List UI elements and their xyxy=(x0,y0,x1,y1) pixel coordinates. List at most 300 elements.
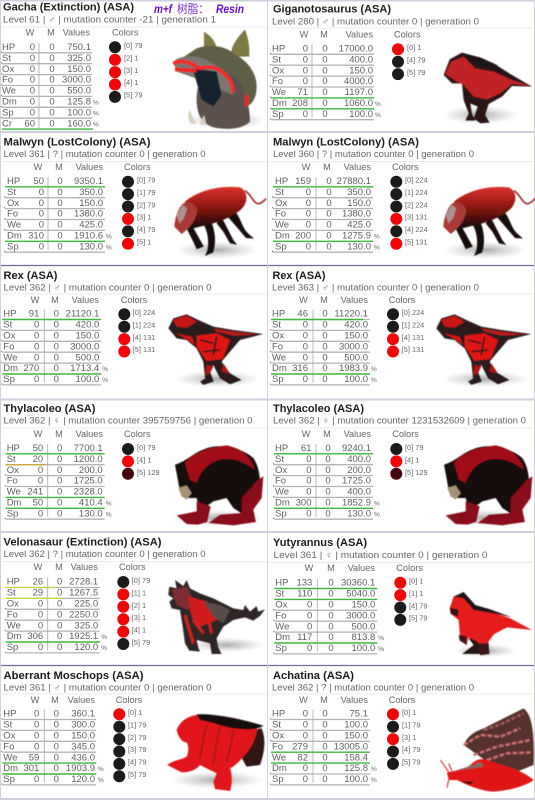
stat table: Dm xyxy=(7,498,22,508)
stat table: % xyxy=(98,777,104,784)
stat table: 0 xyxy=(328,643,334,654)
column headers: W xyxy=(26,28,35,38)
column headers: M xyxy=(55,429,63,439)
column headers: Values xyxy=(344,429,371,439)
color swatches: [4] 79 xyxy=(128,758,146,767)
stat table: 1725.0 xyxy=(74,476,103,487)
stat table: 50 xyxy=(33,443,43,454)
stat table: 3000.0 xyxy=(346,610,375,621)
stat table: 0 xyxy=(49,64,55,75)
stat table: Sp xyxy=(3,374,15,385)
stat table: 0 xyxy=(30,42,35,53)
stat table: St xyxy=(3,720,13,731)
stat table: 158.4 xyxy=(344,752,368,763)
stat table: 316 xyxy=(292,363,308,374)
stat table: 0 xyxy=(39,241,44,252)
stat table: 60 xyxy=(24,118,35,129)
stat table xyxy=(270,709,377,785)
color swatches xyxy=(387,708,420,770)
stat table: 1197.0 xyxy=(345,87,373,98)
stat table: 279 xyxy=(292,741,308,752)
color swatches xyxy=(390,176,428,250)
panel: Malwyn 360 xyxy=(269,136,535,259)
stat table: 0 xyxy=(325,498,331,508)
stat table: 0 xyxy=(322,752,328,763)
stat table: St xyxy=(272,320,281,331)
stat table: 0 xyxy=(54,709,59,720)
callout: m+f resin xyxy=(154,1,244,16)
column headers: Colors xyxy=(392,162,419,172)
stat table: 0 xyxy=(34,741,39,752)
stat table: HP xyxy=(2,42,15,53)
stat table: 0 xyxy=(38,508,43,519)
stat table: 0 xyxy=(303,54,308,65)
stat table: 0 xyxy=(54,774,59,785)
title: Aberrant Moschops: Aberrant Moschops (ASA) xyxy=(4,670,144,682)
stat table: 0 xyxy=(49,96,55,108)
stat table: 0 xyxy=(54,763,59,774)
stat table: 0 xyxy=(49,118,55,129)
stat table: Dm xyxy=(272,363,287,374)
color swatches: [0] 224 xyxy=(405,176,428,184)
stat table: 0 xyxy=(306,198,311,209)
stat table: 0 xyxy=(57,599,62,610)
stat table: 46 xyxy=(297,309,308,320)
stat table: 0 xyxy=(54,341,59,352)
column headers: W xyxy=(302,162,311,172)
stat table: 0 xyxy=(326,230,332,242)
color swatches: [3] 79 xyxy=(128,745,146,754)
stat table: 150.0 xyxy=(344,331,368,342)
stat table: 0 xyxy=(57,220,63,231)
stat table: Fo xyxy=(272,76,283,87)
stat table: 1275.9 xyxy=(342,230,371,242)
column headers xyxy=(300,30,421,40)
stat table: HP xyxy=(272,44,285,54)
column headers: W xyxy=(300,30,309,40)
stat table: 71 xyxy=(297,87,308,98)
stat table: 0 xyxy=(322,44,328,54)
stat table: Fo xyxy=(7,609,18,620)
stat table: 0 xyxy=(34,774,39,785)
stat table: 270 xyxy=(23,363,39,374)
color swatches: [1] 224 xyxy=(405,188,428,197)
stat table: 0 xyxy=(325,443,331,454)
level line: Level 280 | ♂ | mutation counter 0 | generation 0 xyxy=(272,17,479,27)
stat table xyxy=(272,176,380,252)
color swatches: [1] 224 xyxy=(402,320,424,329)
stat table xyxy=(4,176,112,252)
stat table: Ox xyxy=(275,198,287,209)
stat table: 1267.5 xyxy=(69,588,98,599)
stat table: Sp xyxy=(7,241,19,252)
stat table: 1200.0 xyxy=(74,454,103,465)
stat table: 0 xyxy=(303,320,308,331)
column headers xyxy=(299,295,416,305)
panel: Rex 362 xyxy=(2,270,265,387)
stat table: 0 xyxy=(307,600,312,611)
color swatches xyxy=(122,176,156,250)
title: Gacha: Gacha (Extinction) (ASA) xyxy=(3,2,134,14)
stat table: Ox xyxy=(272,731,284,742)
stat table: % xyxy=(374,244,380,251)
stat table: 0 xyxy=(322,98,328,109)
color swatches: [0] 1 xyxy=(407,43,421,52)
stat table: 208 xyxy=(292,98,308,109)
stat table: 159 xyxy=(295,176,311,187)
stat table: 0 xyxy=(34,331,39,342)
stat table: 0 xyxy=(49,86,55,97)
stat table: 82 xyxy=(297,752,308,763)
stat table: 5040.0 xyxy=(346,589,375,600)
stat table: 350.0 xyxy=(79,187,103,198)
stat table: 0 xyxy=(38,465,43,476)
stat table: 30360.1 xyxy=(341,578,375,589)
stat table xyxy=(5,577,107,653)
column headers xyxy=(34,162,151,172)
stat table: 117 xyxy=(297,632,312,643)
column headers: W xyxy=(302,429,311,439)
stat table: 160.0 xyxy=(67,118,91,129)
stat table: % xyxy=(106,234,112,240)
stat table: Sp xyxy=(7,642,18,653)
column headers: M xyxy=(327,563,335,573)
stat table: Cr xyxy=(2,118,12,129)
color swatches: [5] 79 xyxy=(407,68,426,77)
stat table: 0 xyxy=(322,109,328,120)
column headers: M xyxy=(323,162,331,172)
stat table: We xyxy=(272,87,286,98)
stat table: 0 xyxy=(57,508,62,519)
stat table: Ox xyxy=(3,331,16,342)
level line: Level 361 | ♀ | mutation counter 0 | generation 0 xyxy=(274,550,488,560)
stat table: We xyxy=(275,621,289,632)
stat table: 0 xyxy=(38,620,43,631)
stat table: 0 xyxy=(322,320,328,331)
column headers: Colors xyxy=(389,295,416,305)
callout: m+f resin: m+f xyxy=(154,2,173,16)
column headers: W xyxy=(34,162,43,172)
creature: Thylacoleo xyxy=(441,445,532,526)
column headers xyxy=(31,295,148,305)
panel: Rex 363 xyxy=(269,270,533,387)
creature: Rex xyxy=(168,314,263,387)
stat table: 0 xyxy=(307,643,312,654)
stat table: 0 xyxy=(322,741,328,752)
stat table: 0 xyxy=(326,209,332,220)
column headers: M xyxy=(320,295,328,305)
stat table: 0 xyxy=(30,107,35,118)
stat table: 133 xyxy=(296,578,312,589)
stat table: 130.0 xyxy=(79,241,103,252)
stat table: 0 xyxy=(328,610,334,621)
stat table: 91 xyxy=(29,309,39,320)
stat table: HP xyxy=(3,709,17,720)
stat table: 1903.9 xyxy=(66,763,95,774)
stat table: 1983.9 xyxy=(339,363,368,374)
stat table: Sp xyxy=(2,107,14,118)
stat table: Sp xyxy=(275,643,287,654)
stat table: We xyxy=(272,352,286,363)
column headers: Values xyxy=(72,295,99,305)
stat table: 0 xyxy=(54,720,59,731)
stat table: 100.0 xyxy=(76,374,99,385)
creature: Yutyrannus xyxy=(450,592,532,657)
panel: Gacha xyxy=(2,1,267,129)
stat table: 0 xyxy=(322,331,328,342)
column headers: Values xyxy=(63,28,90,38)
stat table: % xyxy=(375,101,381,108)
color swatches: [0] 79 xyxy=(132,576,150,585)
title: Giganotosaurus: Giganotosaurus (ASA) xyxy=(273,4,391,16)
color swatches xyxy=(117,576,150,650)
stat table: 360.1 xyxy=(71,709,95,720)
level line: Level 360 | ? | mutation counter 0 | generation 0 xyxy=(273,149,474,159)
stat table: 0 xyxy=(303,720,308,731)
stat table: 0 xyxy=(306,454,312,465)
panel: Thylacoleo 395759756 xyxy=(2,403,265,526)
creature: Malwyn xyxy=(174,187,266,259)
color swatches: [0] 224 xyxy=(133,308,155,317)
stat table: 0 xyxy=(322,709,328,720)
stat table: % xyxy=(98,766,104,773)
stat table: Ox xyxy=(7,198,19,209)
level line: Level 362 | ? | mutation counter 0 | generation 0 xyxy=(272,683,474,693)
creature: Moschops xyxy=(167,714,264,791)
level line: Level 361 | ? | mutation counter 0 | generation 0 xyxy=(4,149,206,159)
stat table: 100.0 xyxy=(67,107,91,118)
stat table: Dm xyxy=(275,230,290,242)
color swatches: [3] 1 xyxy=(402,733,416,742)
color swatches: [1] 79 xyxy=(137,188,156,197)
color swatches: [1] 79 xyxy=(402,720,420,729)
stat table: 0 xyxy=(306,476,312,487)
stat table: % xyxy=(374,234,380,240)
stat table: 150.0 xyxy=(67,64,91,75)
color swatches: [4] 79 xyxy=(402,745,420,754)
level line: Level 363 | ♂ | mutation counter 0 | generation 0 xyxy=(272,283,479,293)
stat table: 425.0 xyxy=(347,220,371,231)
stat table: 0 xyxy=(57,176,63,187)
stat table: 150.0 xyxy=(349,65,373,76)
stat table: 0 xyxy=(57,620,62,631)
stat table: % xyxy=(101,645,107,652)
stat table: 100.0 xyxy=(344,720,368,731)
stat table: 0 xyxy=(57,609,62,620)
color swatches: [1] 1 xyxy=(409,589,423,598)
stat table: Fo xyxy=(272,341,283,352)
stat table: Fo xyxy=(3,741,14,752)
stat table: 2250.0 xyxy=(69,609,98,620)
stat table xyxy=(274,578,384,654)
column headers: Values xyxy=(346,30,373,40)
stat table: 11220.1 xyxy=(334,309,368,320)
stat table: 0 xyxy=(326,220,332,231)
stat table: 0 xyxy=(34,709,39,720)
stat table: 0 xyxy=(303,709,308,720)
stat table: 100.0 xyxy=(352,643,375,654)
color swatches: [2] 1 xyxy=(124,53,138,62)
title: Rex 363: Rex (ASA) xyxy=(272,270,326,282)
stat table xyxy=(2,42,99,129)
stat table: 0 xyxy=(303,76,308,87)
column headers xyxy=(34,562,146,572)
color swatches: [5] 79 xyxy=(402,758,420,767)
stat table: We xyxy=(275,487,289,498)
color swatches: [0] 79 xyxy=(137,443,156,452)
stat table: 0 xyxy=(39,220,44,231)
stat table: 500.0 xyxy=(76,352,99,363)
title: Velonasaur: Velonasaur (Extinction) (ASA) xyxy=(4,536,162,548)
stat table: 241 xyxy=(27,487,43,498)
stat table: 0 xyxy=(326,176,332,187)
stat table: 225.0 xyxy=(74,599,98,610)
stat table: 0 xyxy=(303,774,308,785)
color swatches xyxy=(113,708,146,782)
stat table: 0 xyxy=(57,577,62,588)
color swatches: [3] 1 xyxy=(124,66,138,75)
stat table: 200.0 xyxy=(347,465,371,476)
stat table: 75.1 xyxy=(350,709,368,720)
stat table: Dm xyxy=(7,230,22,242)
level line: Level 362 | ♂ | mutation counter 0 | generation 0 xyxy=(4,283,212,293)
creature: Thylacoleo xyxy=(172,445,263,526)
panel: Aberrant Moschops xyxy=(2,670,265,791)
stat table: Ox xyxy=(3,731,16,742)
stat table: 0 xyxy=(326,187,332,198)
stat table: Sp xyxy=(272,774,284,785)
stat table: 50 xyxy=(33,498,43,508)
stat table xyxy=(274,443,380,519)
stat table: HP xyxy=(275,578,289,589)
stat table: 0 xyxy=(306,465,312,476)
stat table: 0 xyxy=(328,589,334,600)
stat table: Fo xyxy=(275,476,286,487)
column headers: Colors xyxy=(124,162,151,172)
stat table: 0 xyxy=(325,487,331,498)
stat table: Sp xyxy=(7,508,18,519)
stat table: 7700.1 xyxy=(74,443,103,454)
stat table: 125.8 xyxy=(344,763,368,774)
stat table: 325.0 xyxy=(74,620,98,631)
stat table: 150.0 xyxy=(347,198,371,209)
stat table: 0 xyxy=(303,731,308,742)
stat table: 0 xyxy=(39,187,44,198)
column headers: Values xyxy=(344,162,371,172)
stat table xyxy=(270,44,381,120)
color swatches: [5] 131 xyxy=(133,345,155,354)
stat table: 0 xyxy=(303,44,308,54)
stat table: Dm xyxy=(3,363,18,374)
stat table: 0 xyxy=(34,320,39,331)
stat table: 0 xyxy=(306,487,312,498)
stat table: 0 xyxy=(30,86,35,97)
color swatches: [5] 79 xyxy=(124,91,142,100)
stat table: % xyxy=(93,121,99,128)
stat table: % xyxy=(102,377,108,384)
stat table: 0 xyxy=(39,209,44,220)
column headers: Colors xyxy=(392,429,419,439)
column headers xyxy=(299,695,416,705)
stat table: 0 xyxy=(322,731,328,742)
column headers xyxy=(302,162,419,172)
column headers: Values xyxy=(68,695,95,705)
stat table: Ox xyxy=(7,465,19,476)
color swatches: [5] 1 xyxy=(137,238,151,246)
level line: Level 61 | ♂ | mutation counter -21 | generation 1 xyxy=(3,14,216,24)
color swatches xyxy=(109,41,142,103)
title: Thylacoleo 395759756: Thylacoleo (ASA) xyxy=(4,403,96,415)
stat table: Dm xyxy=(275,632,290,643)
color swatches xyxy=(118,308,155,358)
stat table: 813.8 xyxy=(352,632,375,643)
column headers: Values xyxy=(341,695,368,705)
column headers xyxy=(34,429,151,439)
stat table: 301 xyxy=(23,763,39,774)
stat table: 0 xyxy=(54,309,59,320)
column headers: W xyxy=(34,562,43,572)
color swatches: [5] 131 xyxy=(402,345,424,354)
stat table: 420.0 xyxy=(344,320,368,331)
stat table: 9240.1 xyxy=(342,443,371,454)
color swatches xyxy=(122,443,160,480)
callout: m+f resin: Resin xyxy=(216,2,244,16)
color swatches: [4] 131 xyxy=(133,333,155,342)
color swatches: [5] 129 xyxy=(405,468,428,477)
level line: Level 362 | ♀ | mutation counter 1231532609 | generation 0 xyxy=(273,416,526,426)
stat table: 0 xyxy=(57,631,62,642)
stat table: We xyxy=(3,352,17,363)
stat table: 420.0 xyxy=(76,320,99,331)
title: Yutyrannus: Yutyrannus (ASA) xyxy=(273,537,367,549)
column headers: Values xyxy=(341,295,368,305)
column headers: Colors xyxy=(124,429,151,439)
stat table: 350.0 xyxy=(347,187,371,198)
stat table: HP xyxy=(7,577,20,588)
stat table: 0 xyxy=(57,443,62,454)
stat table: 0 xyxy=(49,107,55,118)
stat table: 325.0 xyxy=(67,53,91,64)
stat table: 0 xyxy=(57,465,62,476)
color swatches: [3] 131 xyxy=(405,213,428,222)
stat table: 0 xyxy=(326,241,332,252)
column headers: M xyxy=(320,30,328,40)
stat table: 0 xyxy=(30,96,35,108)
stat table: Fo xyxy=(7,476,18,487)
creature: Malwyn xyxy=(443,187,535,259)
stat table: 0 xyxy=(30,53,35,64)
column headers: Colors xyxy=(396,563,423,573)
stat table: 0 xyxy=(306,220,311,231)
color swatches: [4] 1 xyxy=(124,78,138,87)
stat table: % xyxy=(375,112,381,119)
stat table: 0 xyxy=(322,763,328,774)
stat table: 0 xyxy=(57,454,62,465)
panel: Yutyrannus xyxy=(269,537,533,657)
stat table: 0 xyxy=(34,352,39,363)
stat table: Ox xyxy=(2,64,14,75)
stat table: 1725.0 xyxy=(342,476,371,487)
stat table: 150.0 xyxy=(76,331,99,342)
stat table: We xyxy=(7,487,21,498)
column headers: Colors xyxy=(116,695,143,705)
stat table: Sp xyxy=(272,374,284,385)
stat table: 1380.0 xyxy=(342,209,371,220)
title: Malwyn 360: Malwyn (LostColony) (ASA) xyxy=(273,136,419,148)
stat table: Dm xyxy=(3,763,18,774)
stat table: 500.0 xyxy=(344,352,368,363)
panel: Malwyn 361 xyxy=(2,136,266,259)
